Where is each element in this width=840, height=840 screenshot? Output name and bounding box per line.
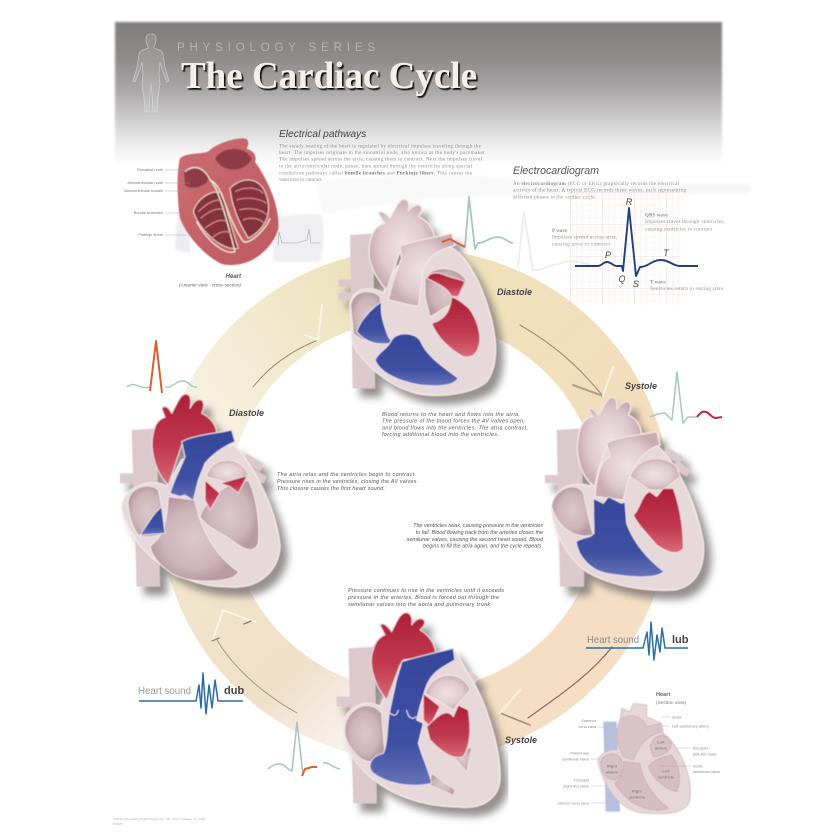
- heart labels: conduction system: Atrioventricular node: [127, 180, 163, 185]
- section view labels: Left: [662, 768, 670, 774]
- text: electrocardiogram body: [513, 180, 686, 200]
- section view labels: Inferior vena cava: [558, 800, 590, 806]
- text: ventricles contract: [277, 472, 418, 492]
- cycle ring: [194, 284, 636, 726]
- section view labels: semilunar valve: [693, 769, 720, 774]
- arrow: bottom left of ring: [212, 610, 297, 713]
- heart: bottom systole: [337, 613, 500, 807]
- heart labels: conduction system: Sinoatrial node: [137, 167, 163, 172]
- text: ventricles relax: to fall. Blood flowing back from the arteries closes the: [416, 530, 543, 536]
- text: ventricles relax: begins to fill the atria again, and the cycle repeats.: [423, 544, 543, 550]
- ECG wave notes: [552, 212, 725, 292]
- copyright: ©2012 Scientific Publishing Ltd., Mt. Gino Village, IL USA: [113, 817, 205, 821]
- section view labels: semilunar valve: [562, 756, 589, 762]
- text: electrical pathways body: ventricles to contract.: [279, 177, 323, 183]
- text: atria fill: Blood returns to the heart and flows into the atria.: [382, 412, 520, 418]
- label: diastole left: Diastole: [229, 408, 264, 418]
- text: ventricles contract: This closure causes the first heart sound.: [277, 486, 385, 492]
- section view labels: Tricuspid: [573, 778, 589, 782]
- text: ejection: pressure in the arteries. Blood is forced out through the: [347, 595, 499, 601]
- ECG wave notes: QRS wave: [645, 212, 669, 218]
- ECG wave notes: causing ventricles to contract: [645, 226, 713, 232]
- section view labels: Left: [657, 740, 665, 744]
- ECG trace: left: [127, 341, 197, 393]
- section view labels: (Section view): [656, 700, 687, 706]
- text: electrical pathways body: The impulses spread across the atria, causing them to contract. Next the impulses travel: [279, 157, 483, 163]
- text: ventricles relax: [407, 523, 544, 550]
- text: electrocardiogram body: different phases in the cardiac cycle.: [513, 194, 596, 200]
- section view labels: ventricle: [629, 794, 646, 800]
- heart sound: lub: [586, 622, 689, 660]
- section view labels: Superior: [581, 718, 597, 723]
- heart labels: conduction system: Atrioventricular bundle: [124, 188, 163, 193]
- section view labels: Left pulmonary artery: [672, 724, 709, 728]
- header banner: [115, 22, 722, 167]
- heart sound: dub: [138, 673, 244, 714]
- text: electrocardiogram body: An electrocardiogram (ECG or EKG) graphically records the electrical: [513, 180, 680, 187]
- ECG trace: right: [650, 372, 722, 423]
- ECG wave notes: T wave: [650, 280, 666, 286]
- section view labels: atrium: [655, 746, 667, 750]
- arrow: bottom right of ring: [500, 647, 612, 725]
- heart sound: lub: lub: [672, 634, 689, 646]
- heart caption: [179, 274, 242, 288]
- section view labels: (left AV) valve: [693, 752, 717, 756]
- section view labels: Pulmonary: [570, 750, 589, 756]
- ECG wave notes: P wave: [552, 228, 568, 234]
- copyright: PO179: [113, 822, 123, 826]
- heart caption: Heart: [226, 274, 242, 280]
- ECG wave letters: R: [626, 197, 633, 207]
- arrow: top left of ring: [253, 305, 322, 387]
- text: electrocardiogram body: activity of the heart. A typical ECG records three waves, each representing: [513, 186, 686, 194]
- heart: section view: [598, 703, 690, 814]
- ECG wave letters: P: [605, 250, 611, 260]
- ECG wave notes: Impulses travel through ventricles,: [645, 219, 725, 225]
- ECG wave notes: Impulses spread across atria,: [552, 234, 617, 240]
- heart labels: conduction system: Bundle branches: [134, 210, 163, 215]
- arrow: top right of ring: [520, 325, 613, 396]
- section view labels: [558, 692, 720, 806]
- section view labels: atrium: [606, 770, 618, 774]
- copyright: [113, 817, 205, 826]
- heading: electrical pathways: Electrical pathways: [279, 129, 366, 140]
- electrocardiogram panel background: [510, 184, 750, 310]
- ECG wave letters: [605, 197, 670, 289]
- text: electrical pathways body: The steady beating of the heart is regulated by electrical impulses traveling through the: [279, 142, 482, 150]
- heart: right systole: [545, 397, 704, 590]
- label: diastole top: Diastole: [497, 287, 532, 297]
- ECG wave notes: causing atria to contract: [552, 242, 611, 248]
- ECG trace: fading: [518, 212, 590, 270]
- section view labels: Bicuspid: [693, 746, 708, 750]
- section view labels: Right: [632, 788, 643, 794]
- icon: human body silhouette: [133, 34, 169, 112]
- ECG wave letters: Q: [618, 274, 626, 284]
- title: The Cardiac Cycle: [181, 55, 477, 97]
- ECG wave letters: T: [663, 248, 670, 258]
- heart sound: lub: Heart sound: [587, 634, 639, 646]
- text: ejection: [347, 588, 504, 608]
- section view labels: ventricle: [658, 774, 675, 780]
- heart caption: (Anterior view - cross-section): [179, 282, 241, 288]
- text: electrical pathways body: [279, 142, 486, 183]
- text: ejection: Pressure continues to rise in the ventricles until it exceeds: [348, 588, 504, 594]
- text: ventricles relax: semilunar valves, causing the second heart sound. Blood: [407, 537, 544, 543]
- label: systole bottom: Systole: [505, 735, 537, 745]
- series label: PHYSIOLOGY SERIES: [177, 42, 375, 54]
- heart: cross section anterior: [177, 138, 278, 265]
- text: atria fill: The pressure of the blood forces the AV valves open,: [382, 418, 525, 424]
- ECG trace marker: top orange: [442, 239, 465, 247]
- text: atria fill: and blood flows into the ventricles. The atria contract,: [382, 426, 528, 432]
- text: atria fill: [382, 412, 528, 438]
- section view labels: Aortic: [693, 764, 703, 768]
- ECG trace: teal top: [465, 197, 513, 249]
- heart sound: dub: dub: [224, 685, 244, 697]
- text: ventricles relax: The ventricles relax, causing pressure in the ventricles: [413, 523, 543, 529]
- text: ejection: semilunar valves into the aorta and pulmonary trunk.: [348, 602, 492, 608]
- heart labels: conduction system: [124, 167, 192, 237]
- text: electrical pathways body: heart. The impulses originate in the sinoatrial node, also known as the body's pacemaker.: [279, 150, 486, 156]
- heading: electrocardiogram: Electrocardiogram: [513, 165, 599, 177]
- text: electrical pathways body: conduction pathways called bundle branches and Purkinje fibers. This causes the: [279, 170, 473, 176]
- ECG wave notes: Ventricles return to resting state: [650, 286, 724, 292]
- label: systole right: Systole: [625, 381, 657, 391]
- section view labels: Right: [607, 764, 618, 768]
- ECG ribbon: [175, 175, 520, 262]
- text: ventricles contract: The atria relax and the ventricles begin to contract.: [277, 472, 416, 478]
- section view labels: vena cava: [578, 724, 597, 729]
- text: ventricles contract: Pressure rises in the ventricles, closing the AV valves.: [277, 479, 418, 485]
- heart sound: dub: Heart sound: [138, 685, 191, 697]
- section view labels: (right AV) valve: [563, 784, 589, 788]
- heart: left diastole: [120, 394, 280, 587]
- section view labels: Aorta: [672, 714, 682, 720]
- text: atria fill: forcing additional blood into the ventricles.: [382, 432, 499, 438]
- section view labels: Heart: [656, 692, 670, 698]
- ECG trace: bottom: [268, 722, 340, 776]
- text: electrical pathways body: to the atrioventricular node, pause, then spread through the ventricles along special: [279, 163, 473, 169]
- ECG trace: main: [575, 208, 698, 276]
- heart labels: conduction system: Purkinje fibers: [138, 232, 163, 237]
- ECG wave letters: S: [633, 279, 639, 289]
- heart: top diastole: [338, 199, 495, 395]
